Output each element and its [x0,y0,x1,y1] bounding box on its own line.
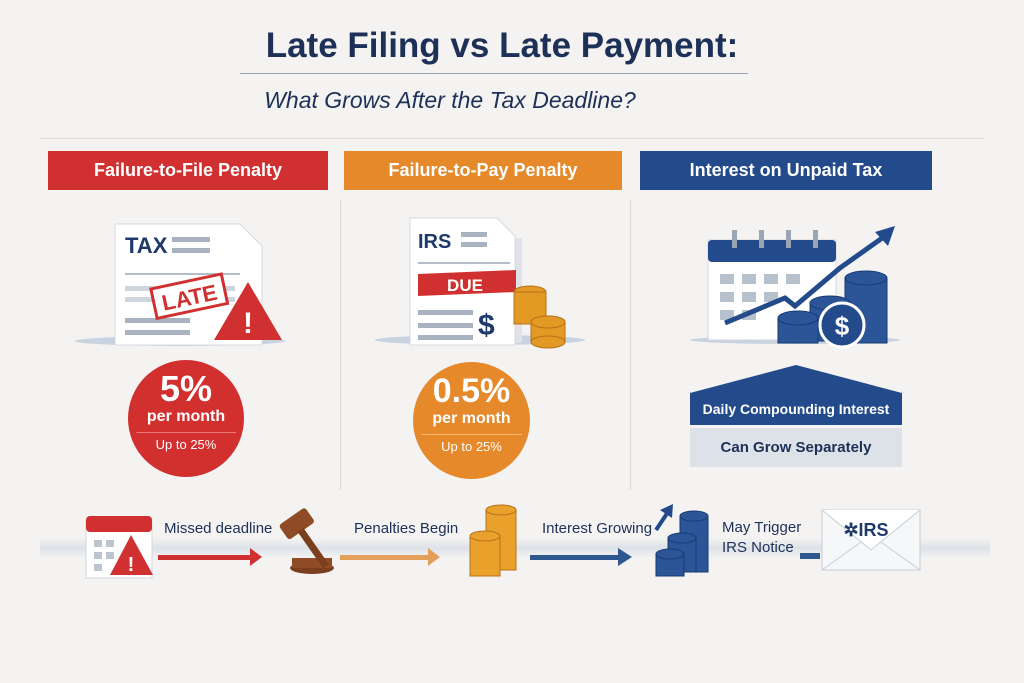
icon: gavel [279,507,340,575]
label: interest growing: Interest Growing [542,520,652,537]
header: failure-to-pay [344,151,622,190]
icon: IRS due document with coins: DUE [447,276,483,295]
icon: IRS envelope: ✲IRS [843,520,889,540]
label: may trigger IRS notice [722,519,801,556]
callout: daily compounding interest [690,365,902,467]
icon: late tax document: LATE [160,280,219,316]
icon: IRS due document with coins [375,218,585,348]
label: penalties begin: Penalties Begin [354,520,458,537]
label: missed deadline: Missed deadline [164,520,272,537]
icon: IRS due document with coins: $ [478,309,495,342]
icon: calendar warning: ! [128,554,134,576]
stat: 0.5% per month: 0.5% [433,372,510,410]
icon: late tax document: TAX [125,233,168,258]
timeline [40,504,990,578]
arrow 3 [530,548,632,566]
icon: late tax document: ! [243,307,253,340]
label: may trigger IRS notice: May Trigger [722,519,801,536]
icon: late tax document [75,224,285,346]
icon: IRS due document with coins: IRS [418,231,451,253]
title: Late Filing vs Late Payment: [266,26,738,65]
stat: 0.5% per month: Up to 25% [441,439,502,454]
icon: calendar with chart and coins [690,226,900,348]
stat: 5% per month: per month [147,408,225,425]
callout: daily compounding interest: Can Grow Separately [721,439,871,456]
callout: daily compounding interest: Daily Compounding Interest [703,401,889,417]
subtitle: What Grows After the Tax Deadline? [264,87,636,113]
label: may trigger IRS notice: IRS Notice [722,539,794,556]
header: interest: Interest on Unpaid Tax [690,160,882,180]
header: failure-to-file: Failure-to-File Penalty [94,160,282,180]
icon: IRS envelope [822,510,920,570]
stat: 0.5% per month [413,362,530,479]
stat: 5% per month [128,360,244,477]
arrow 2 [340,548,440,566]
stat: 5% per month: 5% [160,368,212,409]
arrow 4 [800,553,820,559]
stat: 0.5% per month: per month [432,410,511,427]
icon: calendar warning [86,516,153,578]
icon: calendar with chart and coins: $ [835,311,850,341]
header: interest [640,151,932,190]
header: failure-to-file [48,151,328,190]
arrow 1 [158,548,262,566]
header: failure-to-pay: Failure-to-Pay Penalty [388,160,578,180]
icon: blue coins up arrow [656,504,708,576]
icon: gold coins [470,505,516,576]
stat: 5% per month: Up to 25% [156,437,216,452]
